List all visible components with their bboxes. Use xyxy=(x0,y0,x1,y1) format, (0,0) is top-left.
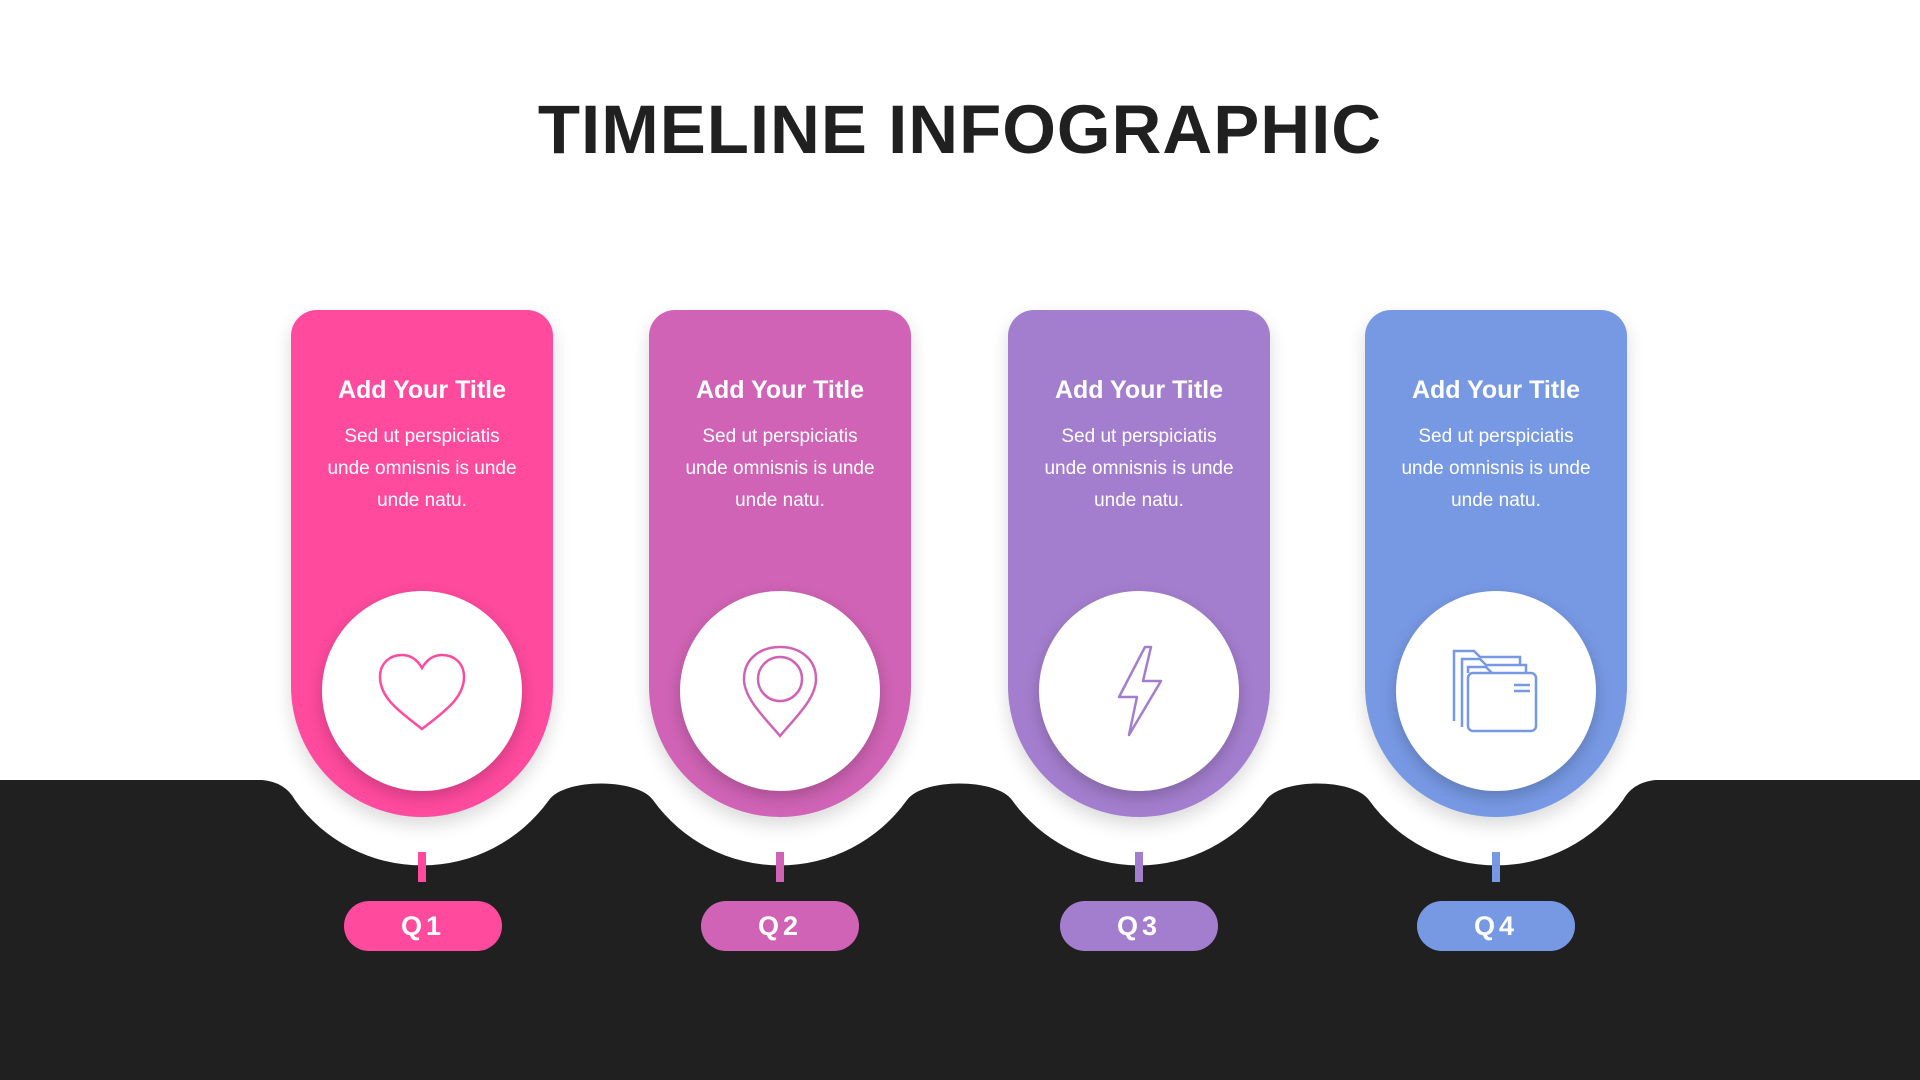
card: Q4: unde omnisnis is unde xyxy=(1401,458,1591,479)
card: Q3: Add Your Title xyxy=(1055,376,1223,404)
card: Q2: unde omnisnis is unde xyxy=(685,458,875,479)
card: Q4: unde natu. xyxy=(1451,490,1541,511)
card: Q2: unde natu. xyxy=(735,490,825,511)
icon: location pin xyxy=(680,591,880,791)
label Q3: Q3 xyxy=(1117,911,1161,941)
card: Q2 xyxy=(649,310,911,817)
card: Q1 xyxy=(291,310,553,817)
card: Q1: unde natu. xyxy=(377,490,467,511)
card: Q2: Add Your Title xyxy=(696,376,864,404)
card: Q3 xyxy=(1008,310,1270,817)
label Q2: Q2 xyxy=(758,911,802,941)
label Q4 xyxy=(1417,901,1575,951)
card: Q3: unde natu. xyxy=(1094,490,1184,511)
title: TIMELINE INFOGRAPHIC xyxy=(538,91,1382,168)
card: Q4: Add Your Title xyxy=(1412,376,1580,404)
card: Q4 xyxy=(1365,310,1627,817)
card: Q1: Add Your Title xyxy=(338,376,506,404)
card: Q4: Sed ut perspiciatis xyxy=(1418,426,1574,447)
card: Q1: unde omnisnis is unde xyxy=(327,458,517,479)
card: Q3: Sed ut perspiciatis xyxy=(1061,426,1217,447)
card: Q1: Sed ut perspiciatis xyxy=(344,426,500,447)
label Q4: Q4 xyxy=(1474,911,1518,941)
label Q1 xyxy=(344,901,502,951)
icon: heart xyxy=(322,591,522,791)
icon: lightning xyxy=(1039,591,1239,791)
card: Q3: unde omnisnis is unde xyxy=(1044,458,1234,479)
tick Q2 xyxy=(776,852,784,882)
tick Q1 xyxy=(418,852,426,882)
tick Q3 xyxy=(1135,852,1143,882)
tick Q4 xyxy=(1492,852,1500,882)
card: Q2: Sed ut perspiciatis xyxy=(702,426,858,447)
label Q1: Q1 xyxy=(401,911,445,941)
label Q3 xyxy=(1060,901,1218,951)
label Q2 xyxy=(701,901,859,951)
icon: folders xyxy=(1396,591,1596,791)
